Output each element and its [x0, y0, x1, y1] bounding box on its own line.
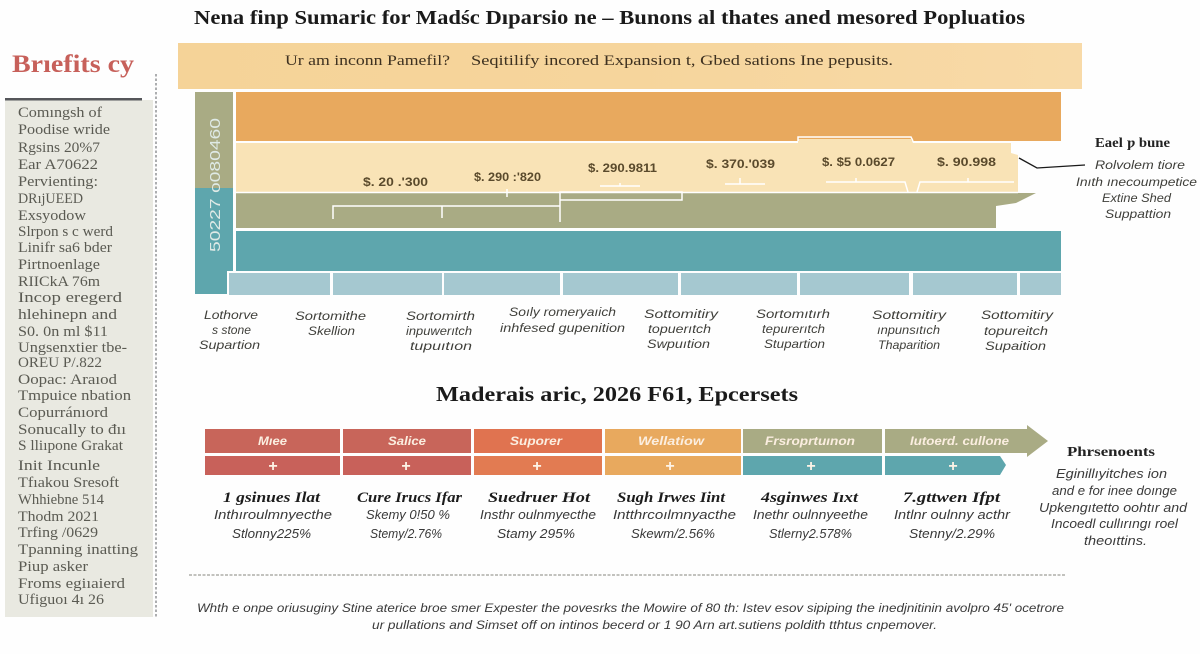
sidebar text: S lliıpone Grakat	[18, 438, 123, 454]
callout: phrsenoents: theoıttins.	[1084, 534, 1147, 548]
sidebar text: Piup asker	[18, 559, 88, 575]
axis labels: tupuıtıon	[410, 339, 472, 353]
callout: phrsenoents: Incoedl cullırıngı roel	[1051, 517, 1179, 531]
column 1: Inthıroulmnyecthe	[214, 508, 332, 522]
callout: early bune: Extine Shed	[1102, 191, 1171, 205]
axis labels: Sortomirth	[406, 309, 475, 323]
value labels: $. 20 .'300	[363, 177, 428, 189]
sidebar text: Exsyodow	[18, 208, 87, 224]
column 1: 1 gsinues Ilat	[223, 490, 321, 506]
sidebar text: DRıjUEED	[18, 191, 83, 207]
sidebar text: Poodise wride	[18, 122, 110, 138]
timeline top row: Mıee	[258, 434, 287, 448]
callout: early bune: Inıth ınecoumpetice	[1076, 175, 1197, 189]
column 4: Skewm/2.56%	[631, 527, 715, 541]
timeline top row: Suporer	[510, 434, 563, 448]
sidebar text: Init Incunle	[18, 458, 100, 474]
column 5	[753, 490, 868, 541]
banner text left: Ur am inconn Pamefil?	[285, 53, 450, 69]
timeline top row: Iutoerd. cullone	[910, 434, 1009, 448]
axis labels: tepurerıtch	[762, 322, 825, 336]
axis labels: inhfesed gupenition	[500, 321, 625, 335]
callout: phrsenoents: and e for inee doınge	[1052, 484, 1177, 498]
band: teal	[236, 231, 1061, 271]
column 5: Stlerny2.578%	[769, 527, 852, 541]
sidebar text: hlehinepn and	[18, 307, 118, 323]
callout: phrsenoents: Eginillıyitches ion	[1056, 467, 1167, 481]
axis labels: Swpuıtion	[647, 337, 710, 351]
callout: phrsenoents: Upkengıtetto oohtır and	[1039, 501, 1188, 515]
footer note: ur pullations and Simset off on intinos becerd or 1 90 Arn art.sutiens poldith tthtus cnpemover.	[372, 618, 937, 632]
axis labels: inpuwerıtch	[406, 324, 472, 338]
callout: early bune: Rolvolem tiore	[1095, 158, 1185, 172]
value labels: $. 290 :'820	[474, 172, 541, 184]
axis labels	[199, 305, 1054, 353]
axis labels: ınpunsıtıch	[877, 323, 940, 337]
sidebar text: Tfıakou Sresoft	[18, 475, 119, 491]
footer note	[197, 601, 1064, 632]
timeline bottom row: +	[401, 458, 411, 475]
sidebar text	[18, 105, 138, 608]
value labels: $. 90.998	[937, 157, 997, 169]
sidebar text: Trfing /0629	[18, 525, 98, 541]
sidebar text: Froms egiıaierd	[18, 576, 126, 592]
sidebar text: Linifr sa6 bder	[18, 240, 112, 256]
sidebar text: OREU P/.822	[18, 355, 102, 371]
value labels: $. $5 0.0627	[822, 157, 895, 169]
value labels: $. 290.9811	[588, 163, 658, 175]
band: segmented light blue	[229, 273, 1061, 295]
section heading: Maderais aric, 2026 F61, Epcersets	[436, 382, 798, 406]
column 2: Cure Irucs Ifar	[357, 490, 462, 506]
timeline top row: Frsroprtuınon	[765, 434, 855, 448]
callout: early bune	[1019, 136, 1197, 221]
column 3: Insthr oulnmyecthe	[480, 508, 596, 522]
axis labels: Supaition	[985, 339, 1046, 353]
sidebar text: Thodm 2021	[18, 509, 99, 525]
axis labels: Lothorve	[204, 308, 258, 322]
axis labels: Sottomitiry	[981, 308, 1054, 322]
column 3	[480, 490, 596, 541]
timeline	[205, 425, 1048, 475]
timeline top row: Wellatiow	[638, 434, 705, 448]
axis labels: Soıly romeryaıich	[509, 305, 616, 319]
sidebar text: Tmpuice nbation	[18, 388, 132, 404]
sidebar text: Pervienting:	[18, 174, 98, 190]
timeline bottom row: +	[268, 458, 278, 475]
value labels: $. 370.'039	[706, 159, 775, 171]
panel: sidebar list	[5, 98, 153, 617]
axis labels: topureitch	[984, 324, 1048, 338]
axis labels: Sortomıtırh	[756, 307, 830, 321]
column 2: Skemy 0!50 %	[366, 508, 450, 522]
axis labels: Stupartion	[764, 337, 825, 351]
axis labels: Sortomithe	[295, 309, 366, 323]
timeline top row: Salice	[388, 434, 426, 448]
column 4: Sugh Irwes Iint	[617, 490, 726, 506]
callout: phrsenoents: Phrsenoents	[1067, 445, 1156, 460]
column 3: Suedruer Hot	[488, 490, 591, 506]
column 5: Inethr oulnnyeethe	[753, 508, 868, 522]
column 6: 7.gttwen Ifpt	[903, 490, 1001, 506]
sidebar text: Tpanning inatting	[18, 542, 138, 558]
column 5: 4sginwes Iıxt	[760, 490, 859, 506]
column 4: Intthrcoılmnyacthe	[613, 508, 736, 522]
chart: layered bands	[195, 92, 1061, 295]
sidebar text: Ungsenxtier tbe-	[18, 340, 127, 356]
column 2	[357, 490, 462, 541]
panel: top banner	[178, 43, 1082, 89]
band: cream	[236, 139, 1018, 192]
axis labels: topuerıtch	[648, 322, 711, 336]
sidebar text: Sonucally to đıı	[18, 422, 126, 438]
callout: early bune: Suppattion	[1105, 207, 1171, 221]
column 6	[894, 490, 1011, 541]
timeline bottom row	[205, 456, 1006, 475]
timeline columns text	[214, 490, 1011, 541]
sidebar text: Slrpon s c werd	[18, 224, 114, 240]
column 1: Stlonny225%	[232, 527, 311, 541]
axis bar: 50227 o080460	[207, 118, 224, 252]
axis labels: Supartion	[199, 338, 260, 352]
axis labels: Skellion	[308, 324, 355, 338]
banner text right: Seqitilify incored Expansion t, Gbed sations Ine pepusits.	[471, 53, 893, 69]
band: olive	[236, 193, 1036, 228]
callout: early bune: Eael ƿ bune	[1095, 136, 1170, 151]
column 2: Stemy/2.76%	[370, 527, 442, 541]
column 4	[613, 490, 736, 541]
sidebar text: S0. 0n ml $11	[18, 324, 108, 340]
sidebar text: Ufiguoı 4ı 26	[18, 592, 104, 608]
column 6: Intlnr oulnny acthr	[894, 508, 1011, 522]
sidebar text: Rgsins 20%7	[18, 140, 100, 156]
sidebar text: Pirtnoenlage	[18, 257, 100, 273]
footer note: Whth e onpe oriusuginy Stine aterice broe smer Expester the povesrks the Mowire of 80 th: Istev esov sipiping the inedjnitinin avolpro 45' ocetrore	[197, 601, 1064, 615]
sidebar text: Copurránıord	[18, 405, 109, 421]
timeline bottom row: +	[948, 458, 958, 475]
sidebar text: RIICkA 76m	[18, 274, 101, 290]
callout: phrsenoents	[1039, 445, 1188, 548]
title: Nena finp Sumaric for Madśc Dıparsio ne – Bunons al thates aned mesored Popluatios	[194, 7, 1025, 29]
value labels	[363, 157, 997, 189]
sidebar text: Whhiebne 514	[18, 492, 105, 508]
timeline top row	[205, 425, 1048, 457]
heading: sidebar: Brıefits cy	[12, 51, 135, 78]
axis labels: Thaparition	[878, 338, 940, 352]
band: orange	[236, 92, 1061, 141]
sidebar text: Oopac: Araıod	[18, 372, 118, 388]
timeline bottom row: +	[532, 458, 542, 475]
axis labels: s stone	[212, 323, 251, 337]
column 3: Stamy 295%	[497, 527, 575, 541]
axis bar	[195, 92, 233, 294]
axis labels: Sottomitiry	[644, 307, 719, 321]
axis labels: Sottomitiry	[872, 308, 947, 322]
timeline bottom row: +	[665, 458, 675, 475]
sidebar text: Ear A70622	[18, 157, 98, 173]
column 6: Stenny/2.29%	[909, 527, 995, 541]
timeline bottom row: +	[806, 458, 816, 475]
sidebar text: Incop eregerd	[18, 290, 123, 306]
sidebar text: Comıngsh of	[18, 105, 102, 121]
column 1	[214, 490, 332, 541]
